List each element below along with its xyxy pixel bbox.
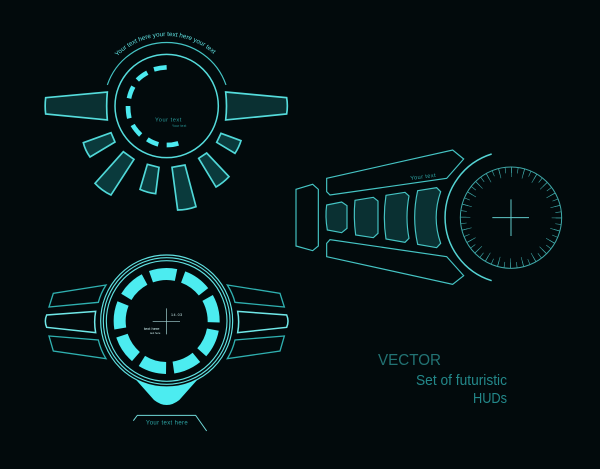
main circle	[115, 54, 218, 158]
dashed arc indicator	[128, 67, 178, 145]
label small text: text here	[150, 331, 161, 335]
subheading line 1: Set of futuristic	[416, 372, 507, 389]
bottom long plate	[327, 240, 464, 284]
segmented gauge ring	[107, 261, 227, 381]
left bar	[45, 92, 107, 120]
left box	[296, 184, 318, 251]
dial	[460, 167, 562, 268]
panel: right dial HUD	[296, 150, 562, 284]
crosshair	[153, 308, 180, 334]
crosshair	[492, 199, 529, 236]
right wings	[227, 285, 288, 359]
lower radial segments	[83, 133, 241, 210]
heading text block	[378, 352, 507, 407]
caption text: Your text here	[146, 421, 188, 427]
caption frame	[133, 415, 207, 431]
panel: top-left radial HUD	[44, 32, 288, 211]
plate text: Your text	[410, 173, 436, 182]
curved bracket	[445, 154, 492, 281]
left wings	[45, 285, 106, 359]
outer arc	[107, 42, 226, 85]
top long plate	[327, 150, 464, 195]
filled segments	[326, 188, 441, 248]
concentric rings	[101, 255, 233, 387]
heading: vector: VECTOR	[378, 352, 441, 369]
readout: 14.03	[171, 313, 183, 317]
teardrop pointer	[135, 379, 198, 405]
centre small text: Your text	[172, 124, 187, 128]
right bar	[226, 92, 287, 120]
subheading line 2: HUDs	[473, 390, 507, 407]
curved caption: Your text here your text here your text	[114, 32, 216, 56]
label text: text here	[144, 326, 160, 331]
panel: bottom-left ring HUD	[45, 255, 288, 431]
centre text: Your text	[155, 118, 182, 124]
